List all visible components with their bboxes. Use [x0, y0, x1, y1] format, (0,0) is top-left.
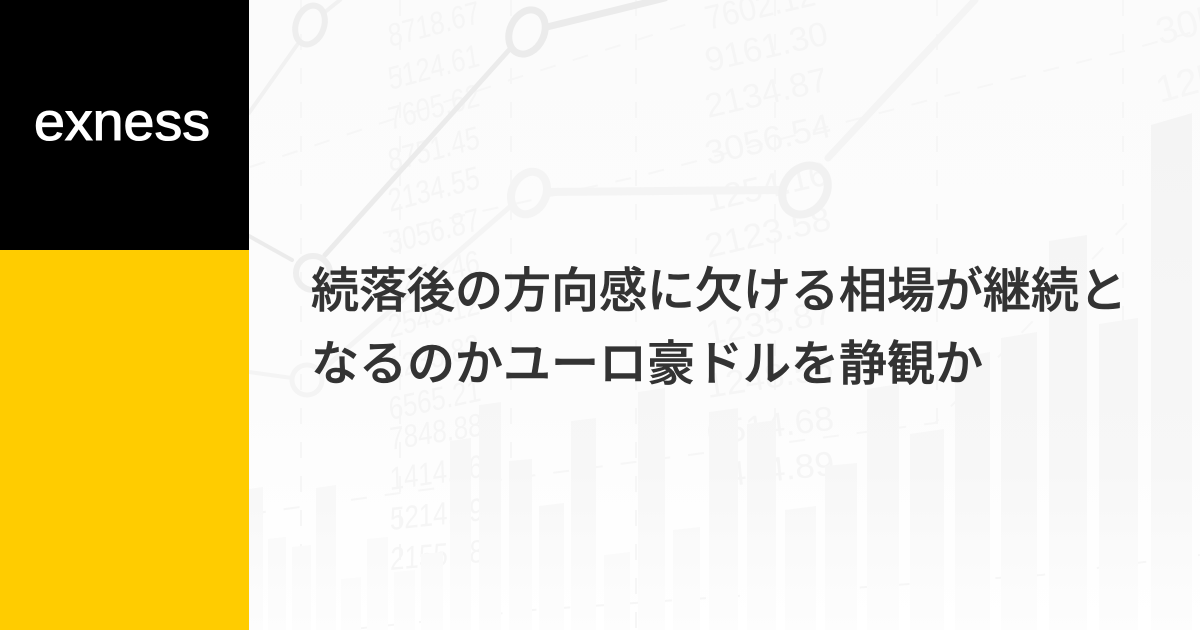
numbers column left [385, 0, 484, 577]
title: 続落後の方向感に欠ける相場が継続と [311, 265, 1127, 318]
numbers column middle: 1414.89 [705, 445, 836, 496]
line chart lower [249, 0, 975, 395]
numbers column left: 6565.21 [387, 372, 483, 427]
numbers column middle: 1254.16 [701, 155, 832, 220]
numbers column left: 1414.86 [389, 448, 483, 497]
numbers column left: 2543.12 [385, 285, 482, 345]
logo: exness: exness [34, 92, 210, 152]
title [311, 265, 1127, 391]
numbers column middle: 2134.87 [701, 61, 832, 126]
numbers column left: 1254.46 [385, 243, 482, 303]
numbers column left: 3056.87 [385, 201, 482, 261]
background chart: lines, numbers and bars [249, 0, 1200, 577]
numbers column right [1151, 0, 1200, 112]
numbers column left: 2134.55 [385, 159, 482, 219]
dashed grid [250, 0, 1200, 630]
numbers column left: 5214.59 [390, 491, 483, 537]
numbers column left: 1235.82 [385, 327, 482, 387]
numbers column left: 5124.61 [385, 37, 482, 97]
numbers column middle: 6514.68 [704, 400, 836, 453]
numbers column middle: 2123.58 [701, 200, 835, 266]
title: なるのかユーロ豪ドルを静観か [311, 338, 983, 391]
bar chart [249, 113, 1192, 630]
numbers column middle: 9161.30 [701, 15, 832, 80]
numbers column left: 2155.38 [390, 533, 484, 577]
line chart upper [249, 0, 665, 290]
numbers column left: 7848.88 [388, 406, 483, 457]
numbers column left: 8751.45 [385, 119, 482, 179]
sidebar: yellow block [0, 250, 249, 630]
numbers column middle: 1248.55 [703, 348, 836, 406]
numbers column middle: 3056.54 [701, 107, 835, 173]
sidebar: black block [0, 0, 249, 250]
numbers column left: 7605.62 [385, 77, 482, 137]
numbers column middle [701, 0, 836, 496]
numbers column middle: 1235.87 [703, 293, 835, 353]
